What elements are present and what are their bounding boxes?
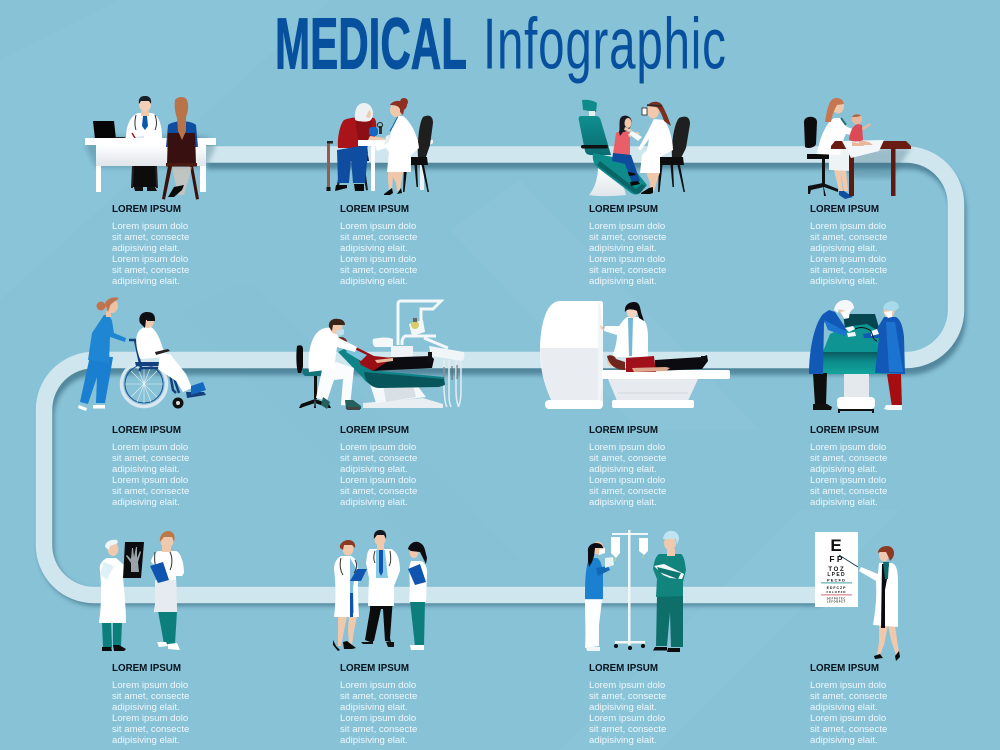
text block 4 — [810, 203, 887, 287]
scene 1: doctor consultation at desk — [85, 96, 216, 200]
text block 12: Lorem ipsum dolo — [810, 680, 886, 691]
text block 6: Lorem ipsum dolo — [340, 475, 416, 486]
text block 7: sit amet, consecte — [589, 453, 666, 464]
text block 11: LOREM IPSUM — [589, 662, 658, 674]
text block 7: Lorem ipsum dolo — [589, 442, 665, 453]
text block 12: adipisiving elait. — [810, 735, 878, 746]
eye chart: F E L O P Z D — [827, 590, 846, 594]
text block 12: sit amet, consecte — [810, 691, 887, 702]
text block 1: Lorem ipsum dolo — [112, 254, 188, 265]
text block 8: adipisiving elait. — [810, 497, 878, 508]
text block 3: Lorem ipsum dolo — [589, 254, 665, 265]
text block 9: Lorem ipsum dolo — [112, 680, 188, 691]
text block 2: adipisiving elait. — [340, 243, 408, 254]
connecting pathway — [44, 154, 958, 598]
dentist — [309, 319, 361, 410]
text block 9: adipisiving elait. — [112, 735, 180, 746]
scene 10: three doctors talking — [333, 530, 427, 651]
text block 5: adipisiving elait. — [112, 497, 180, 508]
lamp head — [409, 318, 425, 336]
column text row 1 — [112, 203, 887, 287]
text block 2: LOREM IPSUM — [340, 203, 409, 215]
eye chart: T O Z — [828, 567, 844, 573]
text block 6: adipisiving elait. — [340, 497, 408, 508]
doctor with pointer — [839, 546, 900, 661]
text block 10: sit amet, consecte — [340, 724, 417, 735]
text block 2 — [340, 203, 417, 287]
eye chart — [815, 532, 858, 607]
text block 9: sit amet, consecte — [112, 724, 189, 735]
text block 8: sit amet, consecte — [810, 486, 887, 497]
text block 5 — [112, 424, 189, 508]
exam table — [358, 140, 433, 191]
text block 1: adipisiving elait. — [112, 243, 180, 254]
walking cane — [326, 141, 333, 191]
text block 1: sit amet, consecte — [112, 232, 189, 243]
surgeon — [653, 531, 686, 652]
scanner bed — [602, 370, 730, 408]
instrument tray — [429, 346, 464, 407]
nurse chair — [402, 116, 433, 192]
dental patient — [335, 337, 434, 371]
patient from behind on chair — [162, 97, 199, 200]
doctor — [126, 96, 162, 191]
text block 9: sit amet, consecte — [112, 691, 189, 702]
doctor with clipboard — [150, 531, 184, 650]
text block 4: sit amet, consecte — [810, 265, 887, 276]
IV stand — [611, 530, 648, 650]
seated patient — [136, 312, 206, 395]
text block 10: adipisiving elait. — [340, 702, 408, 713]
text block 4: Lorem ipsum dolo — [810, 254, 886, 265]
scene 8: surgery — [809, 300, 905, 413]
text block 10: sit amet, consecte — [340, 691, 417, 702]
text block 6: adipisiving elait. — [340, 464, 408, 475]
text block 5: Lorem ipsum dolo — [112, 475, 188, 486]
operating table with drapes — [822, 314, 888, 374]
scene 3: eye examination — [579, 100, 690, 196]
text block 10: LOREM IPSUM — [340, 662, 409, 674]
text block 7: sit amet, consecte — [589, 486, 666, 497]
eye chart: E D F C Z P — [827, 586, 846, 590]
female doctor — [333, 540, 367, 651]
text block 3: sit amet, consecte — [589, 265, 666, 276]
text block 5: sit amet, consecte — [112, 486, 189, 497]
text block 7 — [589, 424, 666, 508]
text block 4: adipisiving elait. — [810, 276, 878, 287]
patient chair — [336, 155, 369, 190]
MRI patient — [607, 355, 708, 372]
text block 1 — [112, 203, 189, 287]
text block 11: adipisiving elait. — [589, 735, 657, 746]
text block 8: adipisiving elait. — [810, 464, 878, 475]
left surgeon — [809, 300, 856, 410]
text block 9: LOREM IPSUM — [112, 662, 181, 674]
text block 11: Lorem ipsum dolo — [589, 680, 665, 691]
MRI machine — [540, 301, 603, 409]
text block 12: Lorem ipsum dolo — [810, 713, 886, 724]
text block 3: Lorem ipsum dolo — [589, 221, 665, 232]
text block 8: Lorem ipsum dolo — [810, 475, 886, 486]
column text row 2 — [112, 424, 887, 508]
doctor with cap — [99, 540, 132, 651]
text block 12 — [810, 662, 887, 746]
dental lamp and arm — [398, 301, 448, 348]
text block 2: Lorem ipsum dolo — [340, 221, 416, 232]
scene 2: blood pressure check — [326, 98, 433, 195]
text block 9: adipisiving elait. — [112, 702, 180, 713]
exam table — [831, 140, 911, 196]
text block 6 — [340, 424, 417, 508]
pedestal — [837, 372, 875, 413]
doctor chair — [657, 117, 690, 192]
text block 2: Lorem ipsum dolo — [340, 254, 416, 265]
x-ray film — [123, 542, 144, 578]
elderly patient — [335, 103, 385, 191]
text block 9 — [112, 662, 189, 746]
text block 8 — [810, 424, 887, 508]
text block 11 — [589, 662, 666, 746]
text block 12: LOREM IPSUM — [810, 662, 879, 674]
text block 10: adipisiving elait. — [340, 735, 408, 746]
male doctor — [361, 530, 400, 647]
text block 7: Lorem ipsum dolo — [589, 475, 665, 486]
office chair — [804, 117, 838, 196]
text block 11: adipisiving elait. — [589, 702, 657, 713]
text block 8: sit amet, consecte — [810, 453, 887, 464]
text block 1: Lorem ipsum dolo — [112, 221, 188, 232]
text block 12: adipisiving elait. — [810, 702, 878, 713]
text block 11: Lorem ipsum dolo — [589, 713, 665, 724]
eye chart: F P — [829, 554, 843, 564]
text block 3: adipisiving elait. — [589, 276, 657, 287]
text block 7: adipisiving elait. — [589, 464, 657, 475]
eye chart: E — [830, 536, 842, 555]
technician — [600, 302, 648, 357]
text block 3: LOREM IPSUM — [589, 203, 658, 215]
text block 9: Lorem ipsum dolo — [112, 713, 188, 724]
eye chart: P E C F D — [827, 578, 845, 582]
text block 1: adipisiving elait. — [112, 276, 180, 287]
text block 10: Lorem ipsum dolo — [340, 680, 416, 691]
scene 4: pediatric checkup — [804, 98, 911, 199]
text block 7: LOREM IPSUM — [589, 424, 658, 436]
text block 11: sit amet, consecte — [589, 691, 666, 702]
eye chart: L E F O D P C T — [827, 600, 846, 604]
text block 6: Lorem ipsum dolo — [340, 442, 416, 453]
text block 2: adipisiving elait. — [340, 276, 408, 287]
text block 12: sit amet, consecte — [810, 724, 887, 735]
eye doctor — [624, 102, 673, 194]
female doctor with teal trousers — [408, 542, 427, 650]
doctor — [817, 98, 861, 199]
child patient — [612, 116, 640, 186]
text block 2: sit amet, consecte — [340, 232, 417, 243]
text block 7: adipisiving elait. — [589, 497, 657, 508]
text block 1: LOREM IPSUM — [112, 203, 181, 215]
title: MEDICAL — [275, 4, 467, 84]
dental chair — [338, 349, 445, 408]
text block 6: sit amet, consecte — [340, 486, 417, 497]
text block 11: sit amet, consecte — [589, 724, 666, 735]
nurse — [585, 542, 614, 651]
examination chair — [579, 100, 647, 196]
text block 1: sit amet, consecte — [112, 265, 189, 276]
text block 10 — [340, 662, 417, 746]
text block 5: sit amet, consecte — [112, 453, 189, 464]
text block 4: Lorem ipsum dolo — [810, 221, 886, 232]
laptop — [93, 121, 125, 139]
text block 8: Lorem ipsum dolo — [810, 442, 886, 453]
scene 7: MRI scan — [540, 301, 730, 409]
nurse — [78, 297, 126, 411]
text block 5: Lorem ipsum dolo — [112, 442, 188, 453]
scene 11: nurse, IV stand and surgeon — [585, 530, 686, 652]
scene 9: doctors reviewing X-ray — [99, 531, 184, 651]
text block 3: adipisiving elait. — [589, 243, 657, 254]
scene 5: nurse pushing wheelchair — [78, 297, 206, 411]
column text row 3 — [112, 662, 887, 746]
text block 6: LOREM IPSUM — [340, 424, 409, 436]
text block 4: adipisiving elait. — [810, 243, 878, 254]
nurse — [375, 98, 419, 195]
text block 6: sit amet, consecte — [340, 453, 417, 464]
text block 2: sit amet, consecte — [340, 265, 417, 276]
text block 5: LOREM IPSUM — [112, 424, 181, 436]
text block 10: Lorem ipsum dolo — [340, 713, 416, 724]
stool — [296, 345, 331, 408]
scene 6: dental treatment — [296, 301, 464, 410]
right surgeon — [855, 301, 905, 410]
eye chart: D E F P O T E C — [827, 598, 845, 600]
spittoon — [373, 338, 413, 366]
eye chart: L P E D — [827, 572, 845, 578]
scene 12: eye test chart — [815, 532, 900, 661]
baby — [849, 114, 873, 146]
text block 8: LOREM IPSUM — [810, 424, 879, 436]
wheelchair — [122, 340, 206, 408]
desk — [85, 138, 216, 192]
text block 3: sit amet, consecte — [589, 232, 666, 243]
text block 4: LOREM IPSUM — [810, 203, 879, 215]
text block 3 — [589, 203, 666, 287]
text block 4: sit amet, consecte — [810, 232, 887, 243]
text block 5: adipisiving elait. — [112, 464, 180, 475]
title: Infographic — [483, 4, 726, 84]
